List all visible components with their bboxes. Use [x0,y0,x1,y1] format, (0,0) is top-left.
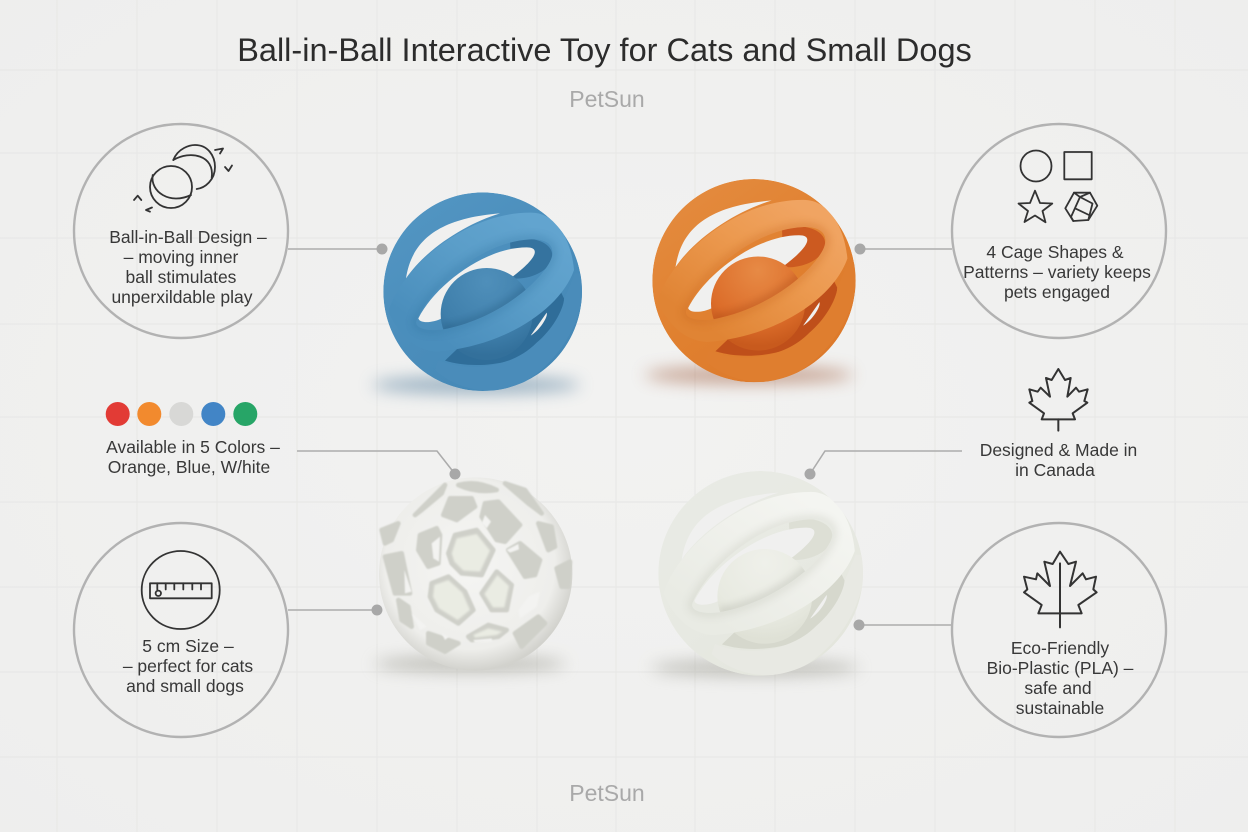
connector: ball-in-ball design to blue ball [288,244,388,254]
connector: cage shapes to orange ball [854,244,952,254]
ball: white ring cage [658,471,865,676]
inner ball faces [433,534,509,638]
text: cage shapes: 4 Cage Shapes & [986,242,1124,262]
panel: ball-in-ball design [74,124,288,338]
text: eco-friendly: Bio-Plastic (PLA) – [987,658,1134,678]
text: made in Canada: Designed & Made in [980,440,1137,460]
text: size [123,636,253,696]
brand name bottom: PetSun [569,780,645,806]
ball shadow: orange [645,366,853,384]
text: size: – perfect for cats [123,656,253,676]
text: cage shapes: pets engaged [1004,282,1110,302]
ball shadow: blue [372,376,580,394]
circle outline: ball-in-ball design [74,124,288,338]
panel: eco-friendly [952,523,1166,737]
text: colours [106,437,280,477]
text: ball-in-ball design [109,227,267,307]
text: cage shapes: Patterns – variety keeps [963,262,1151,282]
colour swatches [106,402,257,426]
text: ball-in-ball design: unperxildable play [111,287,253,307]
text: made in Canada [980,440,1137,480]
ball: blue [383,192,584,391]
text: ball-in-ball design: ball stimulates [126,267,237,287]
icon: maple leaf with stem [1024,552,1097,627]
icon: four cage shapes [1018,150,1097,222]
text: colours: Available in 5 Colors – [106,437,280,457]
circle outline: cage shapes [952,124,1166,338]
connector: eco-friendly to white ball [854,620,952,630]
through-holes showing background [404,515,540,643]
icon: ruler in circle [142,551,220,629]
icon: maple leaf outline [1029,369,1088,431]
circle outline: eco-friendly [952,523,1166,737]
text: eco-friendly: Eco-Friendly [1011,638,1109,658]
text: made in Canada: in Canada [1015,460,1095,480]
text: cage shapes [963,242,1151,302]
connector: colours to lattice ball [297,451,460,480]
circle outline: size [74,523,288,737]
text: size: 5 cm Size – [142,636,234,656]
text: ball-in-ball design: Ball-in-Ball Design – [109,227,267,247]
title: Ball-in-Ball Interactive Toy for Cats and Small Dogs [237,32,972,68]
ball: white lattice [379,477,572,671]
text: size: and small dogs [126,676,244,696]
panel: size [74,523,288,737]
text: eco-friendly: safe and [1024,678,1092,698]
connector: made in Canada to white ball [804,451,962,480]
panel: made in Canada [980,369,1137,480]
ball shadow: white [651,660,859,676]
text: eco-friendly: sustainable [1016,698,1104,718]
connector: size to lattice ball [288,604,382,616]
ball: orange [652,179,857,382]
text: eco-friendly [987,638,1134,718]
text: ball-in-ball design: – moving inner [124,247,239,267]
panel: cage shapes [952,124,1166,338]
brand name top: PetSun [569,86,645,112]
text: colours: Orange, Blue, W/hite [108,457,270,477]
ball shadow: lattice [374,656,566,672]
icon: nested balls with motion marks [134,145,232,212]
panel: colours [106,402,280,477]
